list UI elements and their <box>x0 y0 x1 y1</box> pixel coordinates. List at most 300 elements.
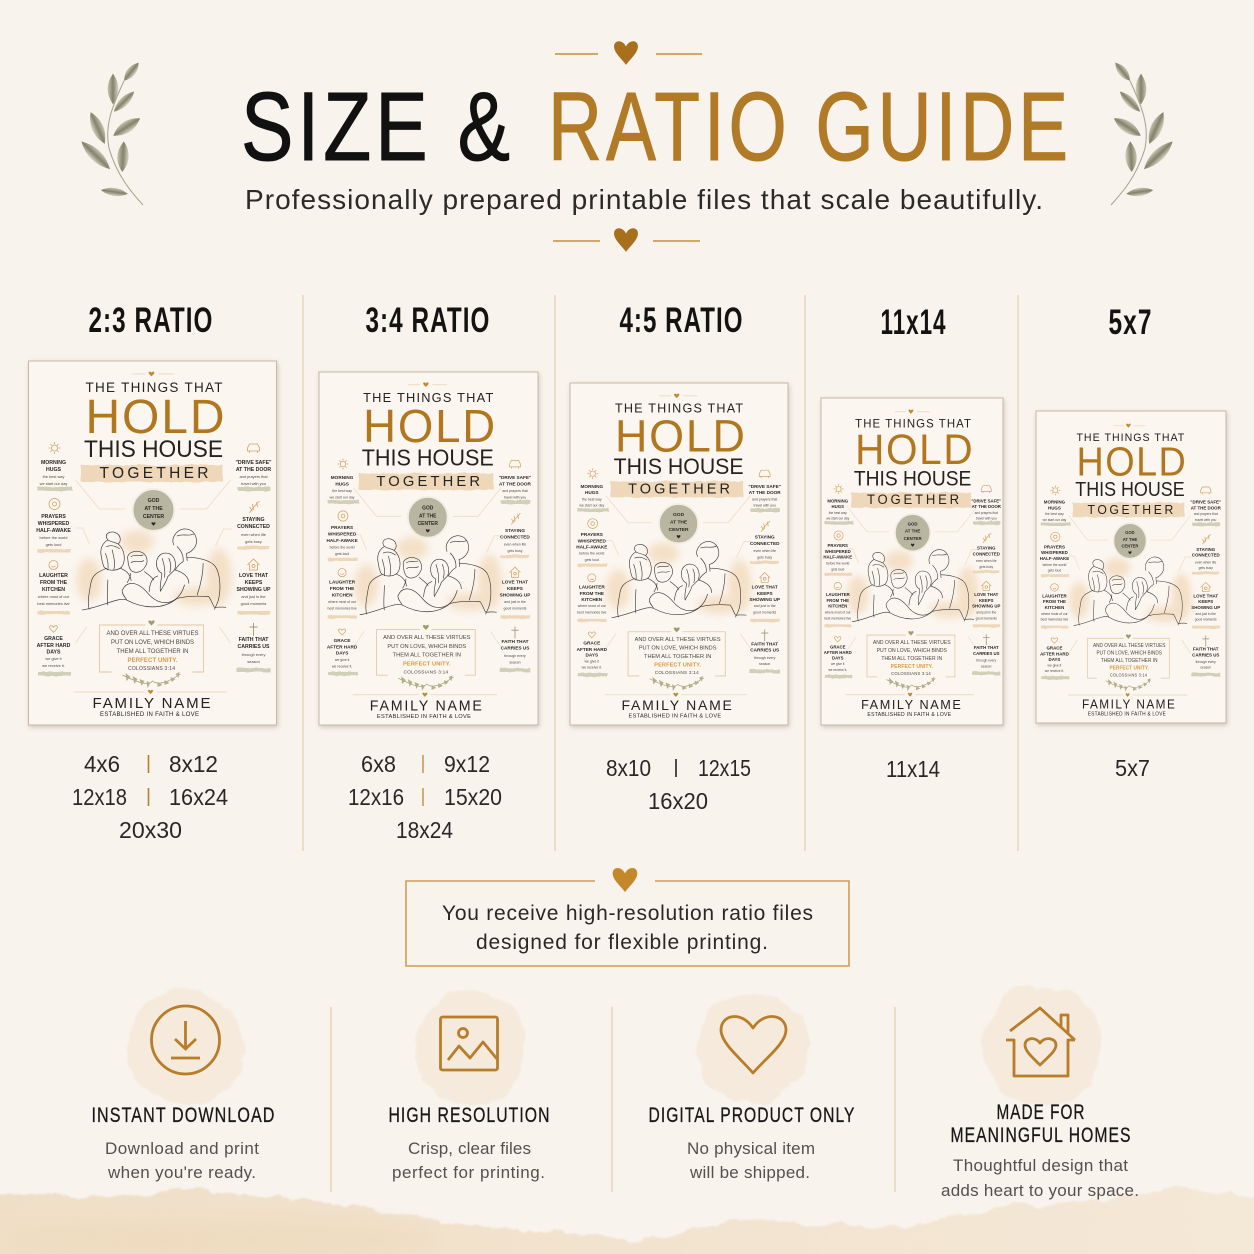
poster right column: CONNECTED <box>973 551 1000 556</box>
poster left column: we receive it. <box>582 666 602 670</box>
poster left column: WHISPERED <box>38 521 69 527</box>
poster right column: and prayers that <box>752 497 777 501</box>
poster centre content: GOD <box>422 505 434 512</box>
poster centre content: THEM ALL TOGETHER IN <box>881 656 942 662</box>
heading: 5x7: 5x7 <box>1108 303 1152 342</box>
poster right column: good moments <box>1195 618 1217 622</box>
poster right column: FAITH THAT <box>974 645 999 650</box>
feature: digital product only: No physical item <box>687 1139 815 1158</box>
poster centre content: THIS HOUSE <box>84 436 223 463</box>
poster centre content: TOGETHER <box>100 465 208 482</box>
poster centre content: ESTABLISHED IN FAITH & LOVE <box>867 712 952 718</box>
poster right column: KEEPS <box>979 598 994 603</box>
poster left column: DAYS <box>336 651 348 657</box>
poster left column: HALF-AWAKE <box>36 528 71 534</box>
sizes: 2:3 ratio: 12x18 <box>72 784 127 810</box>
poster left column: GRACE <box>334 638 351 644</box>
poster centre content: AT THE <box>670 520 688 526</box>
poster: 5x7 <box>1036 411 1226 723</box>
poster left column: AFTER HARD <box>824 650 852 655</box>
poster left column: DAYS <box>586 653 598 658</box>
poster left column: WHISPERED <box>825 549 851 554</box>
poster centre content: AT THE <box>1123 537 1137 542</box>
icon: house with heart <box>1006 1008 1075 1076</box>
poster right column: CARRIES US <box>750 648 779 653</box>
poster right column: LOVE THAT <box>1193 593 1218 598</box>
poster left column: HUGS <box>585 490 599 495</box>
poster right column: SHOWING UP <box>972 604 1000 609</box>
poster left column: gets loud <box>585 558 599 562</box>
poster left column: FROM THE <box>827 598 849 603</box>
poster centre content: GOD <box>148 498 160 504</box>
poster right column: travel with you <box>504 495 526 499</box>
feature: digital product only: will be shipped. <box>689 1163 810 1182</box>
feature dividers <box>331 1007 895 1192</box>
poster right column <box>1190 487 1222 676</box>
poster right column: even when life <box>753 549 776 553</box>
poster: 4:5 ratio <box>570 383 788 725</box>
feature: made for meaningful homes: Thoughtful design that <box>953 1156 1128 1175</box>
poster right column: STAYING <box>755 535 775 540</box>
poster right column: KEEPS <box>1198 599 1213 604</box>
poster left column: we start our day <box>826 517 850 521</box>
poster centre content: PERFECT UNITY. <box>891 664 933 670</box>
poster left column: best memories live <box>37 601 70 606</box>
poster centre content: PERFECT UNITY. <box>1110 666 1149 672</box>
poster left column: LAUGHTER <box>329 580 356 586</box>
poster left column: before the world <box>826 562 849 566</box>
sizes: 3:4 ratio: 12x16 <box>348 784 404 810</box>
poster: 2:3 ratio <box>28 361 276 725</box>
poster right column: FAITH THAT <box>751 642 778 646</box>
poster right column: through every <box>976 659 996 663</box>
poster centre content: PERFECT UNITY. <box>128 658 178 664</box>
poster right column: and just in the <box>976 611 996 615</box>
poster right column: STAYING <box>977 546 996 551</box>
heading: 2:3 ratio: 2:3 RATIO <box>88 301 214 340</box>
poster right column: "DRIVE SAFE" <box>235 460 272 466</box>
poster right column <box>971 486 1002 675</box>
poster left column: HUGS <box>335 481 349 487</box>
poster left column: the best way <box>1045 512 1064 516</box>
poster right column: AT THE DOOR <box>236 467 271 473</box>
poster centre content <box>605 394 752 719</box>
poster right column: STAYING <box>1196 547 1216 552</box>
feature: made for meaningful homes: MADE FOR <box>996 1101 1086 1124</box>
poster left column: before the world <box>40 535 67 540</box>
feature: made for meaningful homes: adds heart to your space. <box>941 1181 1139 1200</box>
poster right column <box>748 470 781 673</box>
poster left column: we start our day <box>330 495 355 499</box>
poster left column: HUGS <box>832 504 844 509</box>
poster centre content: THE THINGS THAT <box>615 402 743 416</box>
poster centre content: TOGETHER <box>1087 502 1173 517</box>
poster left column: AFTER HARD <box>1040 652 1069 656</box>
poster right column: gets busy <box>979 565 994 569</box>
poster right column: "DRIVE SAFE" <box>1190 500 1221 505</box>
poster centre content: AND OVER ALL THESE VIRTUES <box>383 635 471 641</box>
poster right column: LOVE THAT <box>974 592 999 597</box>
poster left column: KITCHEN <box>42 587 65 593</box>
poster left column: LAUGHTER <box>1042 593 1068 598</box>
sizes: 3:4 ratio: 6x8 <box>361 751 396 777</box>
poster centre content: AND OVER ALL THESE VIRTUES <box>1093 643 1166 649</box>
watercolor bottom band <box>0 1188 1254 1254</box>
poster right column: AT THE DOOR <box>749 490 781 495</box>
poster centre content: COLOSSIANS 3:14 <box>655 670 699 675</box>
sizes: 2:3 ratio: 16x24 <box>169 784 228 810</box>
poster centre content: THEM ALL TOGETHER IN <box>644 654 711 660</box>
title: RATIO GUIDE <box>548 72 1072 181</box>
poster right column: CONNECTED <box>237 524 270 530</box>
poster right column: season <box>509 661 521 665</box>
poster right column: through every <box>1196 660 1216 664</box>
poster right column: gets busy <box>1199 566 1213 570</box>
poster centre content: PERFECT UNITY. <box>403 661 451 668</box>
poster right column: FAITH THAT <box>239 637 269 643</box>
poster centre content: FAMILY NAME <box>1082 697 1175 712</box>
poster centre content: PUT ON LOVE, WHICH BINDS <box>111 640 194 646</box>
poster centre content: THE THINGS THAT <box>1076 432 1185 444</box>
poster left column: HALF-AWAKE <box>823 555 852 560</box>
poster right column: AT THE DOOR <box>972 504 1002 509</box>
poster right column: LOVE THAT <box>752 585 778 590</box>
poster right column: CONNECTED <box>750 541 780 546</box>
feature: high resolution: Crisp, clear files <box>408 1139 531 1158</box>
poster centre content: FAMILY NAME <box>92 695 210 712</box>
poster centre content: PERFECT UNITY. <box>654 663 701 669</box>
poster centre content: FAMILY NAME <box>370 698 482 714</box>
sizes: 4:5 ratio: 16x20 <box>648 788 708 814</box>
poster centre content: GOD <box>1125 530 1135 535</box>
poster right column: KEEPS <box>245 580 263 586</box>
poster left column: best memories live <box>577 610 606 614</box>
poster left column: we give it <box>584 659 599 663</box>
poster right column: even when life <box>241 532 266 537</box>
poster centre content <box>1068 424 1191 717</box>
sizes: 2:3 ratio: 4x6 <box>84 751 120 777</box>
poster centre content: THE THINGS THAT <box>86 380 222 395</box>
sizes: 2:3 ratio <box>72 751 228 843</box>
poster left column: AFTER HARD <box>327 645 358 651</box>
poster right column: and prayers that <box>975 511 998 515</box>
poster left column: LAUGHTER <box>39 573 68 579</box>
poster centre content: THEM ALL TOGETHER IN <box>393 653 461 659</box>
poster left column: FROM THE <box>330 586 354 592</box>
poster centre content: HOLD <box>1076 439 1186 485</box>
poster centre content: THE THINGS THAT <box>363 390 493 405</box>
poster left column <box>327 458 359 676</box>
poster right column: CONNECTED <box>1192 553 1220 558</box>
poster left column: before the world <box>1043 563 1066 567</box>
poster right column: KEEPS <box>757 591 773 596</box>
poster centre content: PUT ON LOVE, WHICH BINDS <box>1097 650 1163 656</box>
poster right column: and prayers that <box>502 489 528 493</box>
poster left column: AFTER HARD <box>577 647 608 652</box>
feature: instant download: Download and print <box>105 1139 259 1158</box>
poster right column: season <box>759 662 770 666</box>
top heart divider <box>555 41 702 65</box>
poster centre content: ESTABLISHED IN FAITH & LOVE <box>629 713 721 719</box>
poster left column: GRACE <box>44 636 63 642</box>
poster right column <box>235 444 272 672</box>
poster centre content: COLOSSIANS 3:14 <box>1110 672 1148 677</box>
poster left column: KITCHEN <box>332 593 353 599</box>
poster: 3:4 ratio <box>319 372 538 725</box>
icon: left olive sprig <box>77 60 143 205</box>
poster centre content: CENTER <box>669 527 689 533</box>
poster left column <box>1040 485 1071 680</box>
poster right column: CARRIES US <box>1192 652 1219 657</box>
poster left column: MORNING <box>581 484 603 489</box>
poster right column: "DRIVE SAFE" <box>748 484 781 489</box>
poster right column: even when life <box>1195 560 1216 564</box>
icon: download <box>152 1006 220 1074</box>
poster left column: we give it <box>335 658 349 662</box>
poster centre content: COLOSSIANS 3:14 <box>404 669 448 675</box>
poster left column: before the world <box>579 552 604 556</box>
sizes: 2:3 ratio: 20x30 <box>119 817 182 843</box>
poster left column: HUGS <box>46 467 62 473</box>
poster right column: CONNECTED <box>500 534 530 540</box>
poster centre content: AND OVER ALL THESE VIRTUES <box>873 640 951 646</box>
poster left column: FROM THE <box>580 591 604 596</box>
poster right column: good moments <box>753 610 777 614</box>
poster right column: good moments <box>241 601 266 606</box>
poster left column <box>823 484 854 678</box>
poster left column: HALF-AWAKE <box>576 545 607 549</box>
poster left column: HALF-AWAKE <box>1040 556 1069 561</box>
poster right column: and just in the <box>241 594 266 599</box>
poster centre content: PUT ON LOVE, WHICH BINDS <box>877 648 947 654</box>
poster left column: AFTER HARD <box>37 643 71 649</box>
poster left column: PRAYERS <box>581 532 603 537</box>
poster centre content <box>74 372 232 718</box>
poster right column: CARRIES US <box>973 651 1000 656</box>
poster centre content: AND OVER ALL THESE VIRTUES <box>635 637 721 643</box>
poster centre content: THIS HOUSE <box>362 444 494 471</box>
poster left column: DAYS <box>47 650 61 656</box>
poster centre content: CENTER <box>418 521 438 527</box>
poster right column: FAITH THAT <box>1193 647 1219 651</box>
poster centre content: FAMILY NAME <box>861 697 961 712</box>
poster left column: we give it <box>831 662 845 666</box>
feature: instant download: INSTANT DOWNLOAD <box>92 1104 276 1127</box>
poster left column: KITCHEN <box>581 597 603 602</box>
poster right column: SHOWING UP <box>500 593 530 599</box>
sizes: 3:4 ratio: 15x20 <box>444 784 502 810</box>
feature: high resolution: HIGH RESOLUTION <box>388 1104 550 1127</box>
subtitle: Professionally prepared printable files that scale beautifully. <box>245 184 1043 215</box>
poster centre content: TOGETHER <box>628 482 730 498</box>
heading: 4:5 ratio: 4:5 RATIO <box>620 301 744 340</box>
heading: 11x14: 11x14 <box>880 303 946 342</box>
poster centre content: CENTER <box>1122 544 1138 549</box>
poster left column: PRAYERS <box>1044 544 1065 549</box>
poster right column: even when life <box>976 559 997 563</box>
poster right column: CARRIES US <box>501 646 529 652</box>
icon: image <box>440 1017 498 1070</box>
sizes: 3:4 ratio <box>348 751 502 843</box>
poster right column <box>499 460 531 672</box>
poster left column: DAYS <box>1049 657 1060 662</box>
feature: made for meaningful homes: MEANINGFUL HOMES <box>950 1124 1132 1147</box>
poster centre content: COLOSSIANS 3:14 <box>891 671 931 676</box>
poster right column: STAYING <box>242 517 265 523</box>
poster centre content: HOLD <box>855 425 973 473</box>
poster left column: we give it <box>45 656 63 661</box>
poster centre content: THEM ALL TOGETHER IN <box>116 649 188 655</box>
poster left column: the best way <box>43 474 64 479</box>
sizes: 2:3 ratio: 8x12 <box>169 751 218 777</box>
poster right column: FAITH THAT <box>502 639 529 645</box>
poster right column: gets busy <box>508 549 523 553</box>
poster right column: gets busy <box>757 555 772 559</box>
lower heart divider <box>553 228 700 252</box>
poster left column: MORNING <box>1044 500 1066 505</box>
poster centre content: AT THE <box>419 513 437 519</box>
poster centre content: ESTABLISHED IN FAITH & LOVE <box>100 712 199 718</box>
poster right column: season <box>1200 666 1211 670</box>
poster left column: we receive it. <box>1045 669 1064 673</box>
poster right column: even when life <box>504 543 526 547</box>
poster left column: gets loud <box>1048 569 1061 573</box>
poster right column: and just in the <box>1195 612 1216 616</box>
poster left column: MORNING <box>331 475 354 481</box>
poster left column: GRACE <box>830 644 846 649</box>
poster centre content: CENTER <box>143 514 164 520</box>
poster right column: SHOWING UP <box>1191 605 1220 610</box>
poster left column: before the world <box>330 545 355 549</box>
poster right column: through every <box>504 654 526 658</box>
poster centre content: HOLD <box>363 400 495 452</box>
feature: high resolution <box>388 992 550 1182</box>
feature: instant download <box>92 990 276 1182</box>
poster left column: we start our day <box>40 481 67 486</box>
poster left column: the best way <box>582 497 602 501</box>
poster centre content: GOD <box>673 512 685 518</box>
poster left column: we start our day <box>579 504 605 508</box>
poster centre content: FAMILY NAME <box>622 697 732 713</box>
poster centre content <box>353 382 502 720</box>
poster left column: where most of our <box>825 611 852 615</box>
poster left column: FROM THE <box>40 580 68 586</box>
poster centre content <box>846 410 979 718</box>
poster centre content: ESTABLISHED IN FAITH & LOVE <box>1088 711 1166 717</box>
sizes: 3:4 ratio: 18x24 <box>396 817 453 843</box>
poster right column: through every <box>242 652 265 657</box>
poster right column: travel with you <box>1195 518 1216 522</box>
poster centre content: TOGETHER <box>867 492 959 507</box>
poster left column: best memories live <box>328 607 357 611</box>
poster left column: KITCHEN <box>1045 605 1064 610</box>
poster left column: gets loud <box>46 542 61 547</box>
poster left column: LAUGHTER <box>579 585 605 590</box>
poster left column: gets loud <box>831 567 844 571</box>
callout: high-resolution files: designed for flexible printing. <box>476 931 768 954</box>
poster left column <box>36 442 72 676</box>
poster left column: KITCHEN <box>828 604 847 609</box>
poster right column: and prayers that <box>239 474 268 479</box>
poster right column: season <box>981 664 992 668</box>
sizes: 3:4 ratio: 9x12 <box>444 751 490 777</box>
poster right column: "DRIVE SAFE" <box>971 498 1001 503</box>
poster centre content: CENTER <box>904 536 922 541</box>
poster right column: through every <box>754 656 776 660</box>
poster right column: SHOWING UP <box>236 587 271 593</box>
poster centre content: THEM ALL TOGETHER IN <box>1101 658 1158 664</box>
poster right column: good moments <box>503 607 527 611</box>
poster left column: where most of our <box>1041 612 1069 616</box>
sizes: 5x7: 5x7 <box>1115 755 1150 781</box>
poster left column: MORNING <box>41 460 66 466</box>
poster right column: travel with you <box>241 481 266 486</box>
poster right column: STAYING <box>505 528 525 534</box>
icon: right olive sprig <box>1111 60 1177 205</box>
poster left column: the best way <box>332 489 352 493</box>
poster left column: LAUGHTER <box>826 592 851 597</box>
poster right column: SHOWING UP <box>749 597 780 602</box>
poster centre content: AT THE <box>905 529 920 534</box>
callout: high-resolution files <box>406 868 849 966</box>
poster centre content: AND OVER ALL THESE VIRTUES <box>106 631 198 637</box>
poster centre content: PUT ON LOVE, WHICH BINDS <box>387 644 466 650</box>
poster right column: and prayers that <box>1194 512 1218 516</box>
poster right column: gets busy <box>245 539 262 544</box>
poster centre content: THIS HOUSE <box>614 454 744 479</box>
poster centre content: THIS HOUSE <box>854 467 971 491</box>
poster centre content: THE THINGS THAT <box>855 417 971 431</box>
poster right column: and just in the <box>504 600 526 604</box>
feature: made for meaningful homes <box>941 986 1139 1200</box>
title: SIZE & <box>241 72 514 181</box>
poster right column: season <box>247 659 260 664</box>
poster right column: good moments <box>976 616 997 620</box>
poster left column: we receive it. <box>828 668 847 672</box>
poster right column: LOVE THAT <box>502 580 528 586</box>
poster left column: PRAYERS <box>41 514 66 520</box>
poster centre content: HOLD <box>86 391 224 444</box>
column dividers <box>303 295 1018 851</box>
feature: digital product only: DIGITAL PRODUCT ONLY <box>648 1104 856 1127</box>
poster left column: WHISPERED <box>578 538 607 543</box>
feature: digital product only <box>648 992 856 1182</box>
poster centre content: TOGETHER <box>376 473 480 490</box>
poster left column: where most of our <box>38 594 70 599</box>
poster left column: DAYS <box>832 656 844 661</box>
poster left column: PRAYERS <box>331 525 353 531</box>
poster centre content: COLOSSIANS 3:14 <box>128 666 175 672</box>
poster right column: and just in the <box>754 604 776 608</box>
poster left column: the best way <box>829 511 847 515</box>
poster centre content: PUT ON LOVE, WHICH BINDS <box>639 646 717 652</box>
poster right column: AT THE DOOR <box>1191 505 1222 510</box>
poster left column: we receive it. <box>332 664 352 668</box>
poster right column: "DRIVE SAFE" <box>499 475 531 481</box>
poster left column: we give it <box>1048 663 1061 667</box>
poster left column: PRAYERS <box>828 543 848 548</box>
poster left column: MORNING <box>827 498 849 503</box>
sizes: 11x14: 11x14 <box>886 756 940 782</box>
poster left column: we receive it. <box>42 663 65 668</box>
heading: 3:4 ratio: 3:4 RATIO <box>366 301 490 340</box>
sizes: 4:5 ratio: 12x15 <box>698 755 751 781</box>
poster left column: GRACE <box>583 641 600 646</box>
poster left column: best memories live <box>1041 618 1068 622</box>
poster left column: FROM THE <box>1043 599 1066 604</box>
poster right column: CARRIES US <box>238 644 270 650</box>
icon: heart <box>721 1016 786 1073</box>
